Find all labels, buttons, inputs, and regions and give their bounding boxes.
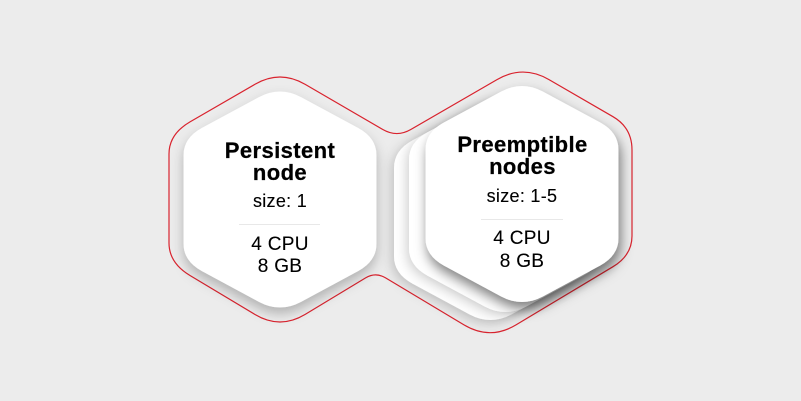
divider [239,224,320,225]
heading: preemptible nodes: nodes [489,154,556,179]
red outline around node groups [169,72,632,333]
heading: persistent node: node [253,160,307,185]
specs text: 8 GB [258,256,302,277]
specs text: 4 CPU [251,234,309,255]
heading: persistent node: Persistent [225,138,335,163]
size text: size: 1-5 [487,186,557,206]
hexagon: persistent node [184,91,376,308]
heading: preemptible nodes: Preemptible [457,132,588,157]
specs text: 4 CPU [493,228,551,249]
panel: persistent node [184,91,376,308]
hexagon: front node [426,86,618,302]
panel: preemptible nodes [394,86,618,320]
size text: size: 1 [253,191,307,211]
specs text: 8 GB [500,251,544,272]
divider [481,219,563,220]
hexagon: back node [394,104,587,320]
hexagon: middle node [409,96,602,312]
